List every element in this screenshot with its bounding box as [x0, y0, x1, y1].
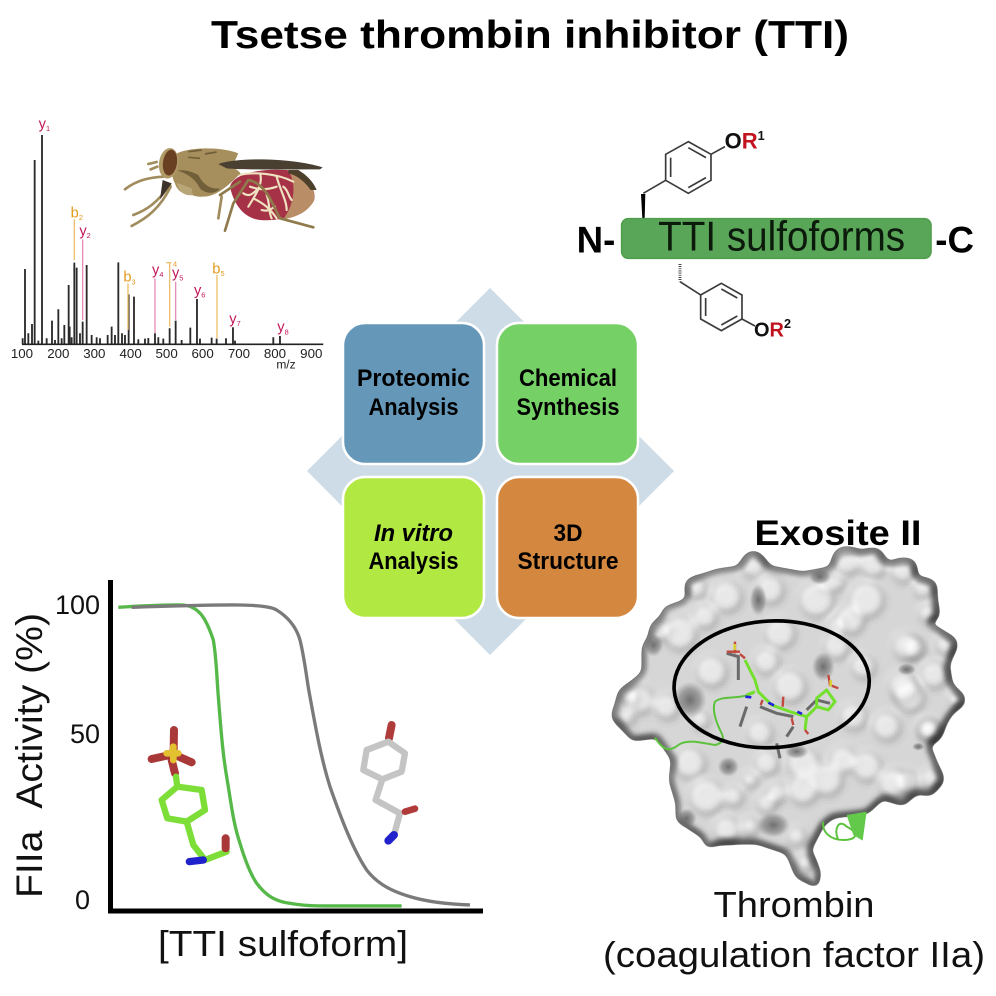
ion labels: 5 — [179, 273, 183, 282]
green peptide bar — [622, 219, 931, 258]
x axis tick labels: 700 — [228, 346, 250, 361]
ion labels: y — [229, 311, 237, 327]
sulfated tyrosine model — [152, 730, 227, 862]
panel: Chemical Synthesis: Chemical — [519, 365, 617, 392]
fly thorax — [172, 148, 241, 197]
mass spectrum chart — [11, 116, 323, 372]
fly proboscis — [160, 180, 172, 199]
title: Tsetse thrombin inhibitor (TTI) — [211, 14, 849, 57]
y axis label: FIIa Activity (%) — [9, 613, 50, 898]
panel: Proteomic Analysis — [343, 323, 484, 464]
thrombin surface structure — [612, 545, 964, 887]
bar label: TTI sulfoforms — [658, 214, 905, 260]
ion labels — [39, 116, 289, 336]
panel: In vitro Analysis: In vitro — [374, 520, 453, 547]
x axis tick labels: 600 — [192, 346, 214, 361]
fly antenna and forelegs — [125, 162, 222, 226]
OR1 label: OR — [725, 129, 758, 154]
fly abdomen stripe — [288, 170, 317, 190]
OR2 label: 2 — [784, 317, 791, 331]
y tick labels: 100 — [55, 590, 100, 620]
y tick labels: 50 — [70, 719, 100, 749]
label: coagulation factor IIa: (coagulation factor IIa) — [603, 934, 985, 975]
panel: In vitro Analysis: Analysis — [368, 548, 458, 575]
ion labels: 6 — [201, 291, 205, 300]
mass spectrum chart: b — [212, 261, 220, 277]
x axis tick labels: 100 — [11, 346, 33, 361]
fly abdomen veins — [240, 173, 293, 218]
mass spectrum chart: 3 — [131, 277, 136, 286]
lower hashed bond — [675, 264, 684, 282]
m/z axis label: m/z — [276, 358, 296, 372]
ion labels: 1 — [46, 124, 50, 133]
N terminus: N- — [577, 220, 615, 261]
x axis tick labels: 200 — [47, 346, 69, 361]
OR1 label: 1 — [758, 129, 765, 143]
spectrum baseline — [22, 342, 323, 347]
small helix — [847, 812, 867, 841]
peptide heteroatoms — [727, 642, 838, 734]
ion labels: y — [194, 283, 201, 299]
ion labels: y — [152, 262, 159, 278]
gray curve — [132, 605, 470, 905]
ion labels: y — [79, 223, 87, 239]
panel: 3D Structure — [497, 477, 638, 618]
x axis label: [TTI sulfoform] — [158, 923, 408, 964]
surface crevices — [643, 569, 924, 838]
protein surface relief — [612, 545, 964, 887]
panel: 3D Structure: 3D — [554, 520, 582, 547]
fragment ion markers — [74, 219, 217, 338]
lower tyrosine side chain — [680, 282, 755, 331]
exosite ellipse — [671, 616, 872, 753]
ion labels: 7 — [237, 319, 241, 328]
spectrum peaks — [23, 135, 280, 344]
mass spectrum chart: b — [123, 270, 131, 286]
icon: tsetse fly — [125, 147, 323, 231]
fly mid and hind legs — [220, 180, 313, 231]
axes — [110, 580, 483, 911]
x axis tick labels: 400 — [120, 346, 142, 361]
peptide green residues — [745, 660, 835, 730]
panel: 3D Structure: Structure — [518, 548, 618, 575]
workflow diamond — [307, 288, 674, 655]
bound peptide ribbon — [655, 693, 855, 840]
heading: Exosite II: Exosite II — [754, 514, 922, 553]
fly head and eye — [157, 147, 180, 180]
mass spectrum chart: 5 — [220, 269, 225, 278]
mass spectrum chart: 4 — [173, 260, 177, 269]
peptide gray residues — [727, 653, 830, 758]
C terminus: -C — [935, 220, 974, 261]
panel: Proteomic Analysis: Proteomic — [357, 365, 470, 392]
x axis tick labels: 500 — [156, 346, 178, 361]
x axis tick labels: 800 — [264, 346, 286, 361]
x axis tick labels: 300 — [83, 346, 105, 361]
x axis tick labels — [11, 346, 322, 361]
panel: Chemical Synthesis: Synthesis — [516, 394, 620, 421]
panel: Chemical Synthesis — [497, 323, 638, 464]
y tick labels: 0 — [75, 885, 90, 915]
fly abdomen — [230, 170, 315, 220]
structure: TTI sulfoforms peptide — [577, 129, 974, 342]
fly wing — [218, 159, 323, 169]
upper wedge bond — [641, 194, 645, 218]
panel: In vitro Analysis — [343, 477, 484, 618]
mass spectrum chart: b — [71, 205, 79, 221]
tyrosine model — [363, 725, 415, 841]
mass spectrum chart: 2 — [79, 213, 83, 222]
ion labels: 2 — [87, 231, 91, 240]
OR2 label: OR — [754, 320, 784, 342]
ion labels: y — [39, 116, 46, 132]
panel: Proteomic Analysis: Analysis — [368, 394, 458, 421]
background diamond — [307, 288, 674, 655]
y tick labels — [55, 590, 100, 915]
ion labels: y — [172, 266, 179, 282]
ion labels: 8 — [285, 327, 289, 336]
ion labels: 4 — [159, 270, 163, 279]
chart: FIIa activity dose response — [9, 580, 483, 964]
label: Thrombin: Thrombin — [714, 884, 874, 925]
upper tyrosine side chain — [643, 142, 725, 193]
ion labels: y — [277, 320, 285, 336]
green curve — [118, 605, 402, 906]
x axis tick labels: 900 — [300, 346, 322, 361]
